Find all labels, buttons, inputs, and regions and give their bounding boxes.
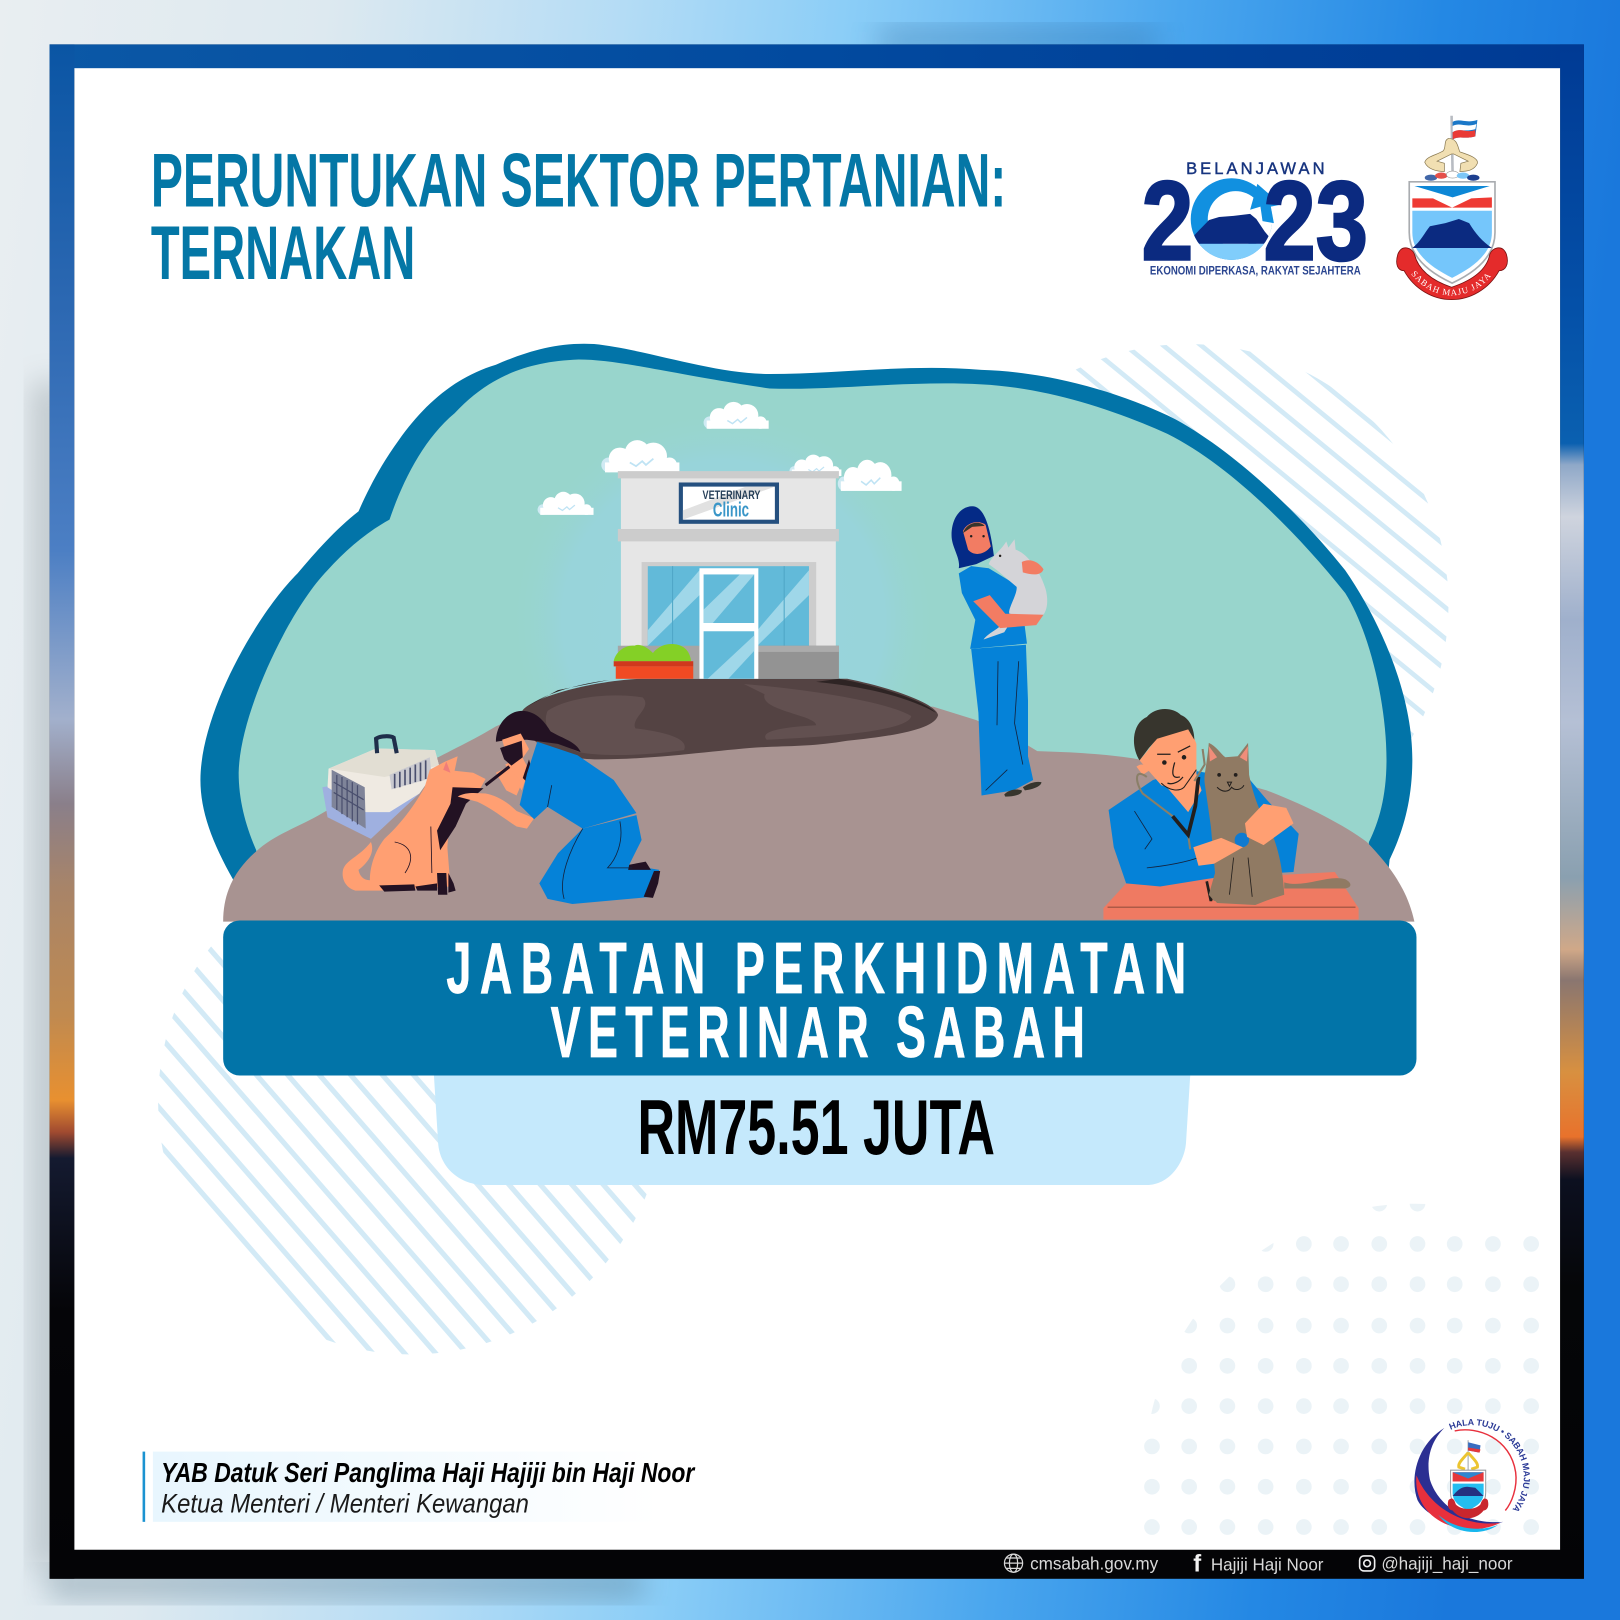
hill	[223, 707, 1414, 922]
footer links: @hajiji_haji_noor	[1381, 1553, 1513, 1574]
banner	[223, 921, 1416, 1076]
footer links	[1004, 1550, 1513, 1577]
blob sky	[239, 360, 1387, 909]
title: TERNAKAN	[151, 211, 415, 296]
minister credit: Ketua Menteri / Menteri Kewangan	[161, 1489, 529, 1519]
standing vet with rabbit	[952, 506, 1047, 797]
banner heading: VETERINAR SABAH	[551, 992, 1085, 1073]
orange cat	[343, 756, 486, 895]
icon: globe	[1004, 1554, 1023, 1572]
planter	[614, 644, 693, 679]
clinic sign	[679, 482, 779, 524]
stripes top right	[1076, 344, 1448, 738]
banner heading	[446, 928, 1186, 1073]
footer links: cmsabah.gov.my	[1030, 1553, 1158, 1573]
logo: Hala Tuju Sabah Maju Jaya	[1414, 1419, 1530, 1532]
logo: Belanjawan 2023: EKONOMI DIPERKASA, RAKYAT SEJAHTERA	[1150, 263, 1361, 277]
amount tab	[434, 1076, 1190, 1185]
logo: Belanjawan 2023: 2	[1142, 157, 1193, 283]
logo: Belanjawan 2023: 23	[1264, 157, 1368, 283]
logo: Hala Tuju Sabah Maju Jaya: HALA TUJU • SABAH MAJU JAYA	[1448, 1419, 1530, 1511]
dark mound	[522, 679, 938, 759]
footer links: Hajiji Haji Noor	[1211, 1554, 1324, 1574]
logo: Belanjawan 2023	[1144, 162, 1366, 276]
footer links: f	[1193, 1550, 1201, 1577]
kneeling vet	[458, 711, 660, 904]
sky glow	[508, 408, 938, 832]
dot pattern	[1144, 1196, 1539, 1535]
minister credit: YAB Datuk Seri Panglima Haji Hajiji bin Haji Noor	[161, 1457, 696, 1488]
icon: instagram	[1360, 1556, 1375, 1571]
title	[151, 139, 1006, 296]
clinic sign: VETERINARY	[703, 488, 761, 502]
amount: RM75.51 JUTA	[637, 1085, 995, 1171]
clinic sign: Clinic	[713, 499, 749, 522]
clinic building	[614, 471, 839, 679]
logo: Sabah crest: SABAH MAJU JAYA	[1411, 271, 1491, 296]
table	[1103, 872, 1359, 920]
vet with stethoscope and cat	[1109, 709, 1350, 905]
title: PERUNTUKAN SEKTOR PERTANIAN:	[151, 139, 1006, 224]
logo: Sabah crest	[1396, 116, 1508, 300]
illustration: veterinary scene	[200, 344, 1414, 922]
stripes bottom left	[158, 930, 646, 1354]
blob outline	[200, 344, 1412, 909]
minister credit	[143, 1452, 696, 1522]
clouds	[538, 402, 902, 515]
banner heading: JABATAN PERKHIDMATAN	[446, 928, 1186, 1008]
logo: Belanjawan 2023: BELANJAWAN	[1186, 159, 1325, 178]
pet carrier	[322, 736, 439, 839]
